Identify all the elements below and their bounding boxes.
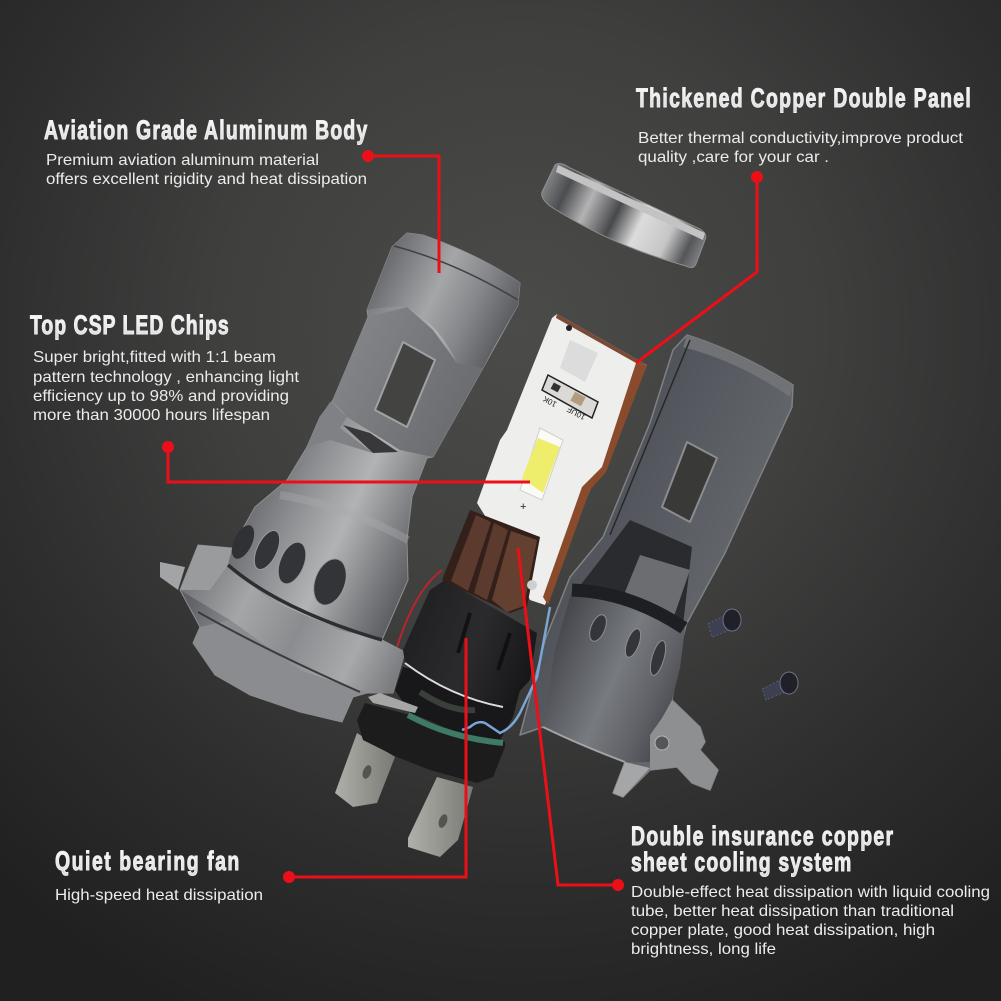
text block: CSP LED chips: Top CSP LED Chips: [30, 310, 229, 340]
text block: aviation aluminum body: Aviation Grade Aluminum Body: [44, 115, 367, 145]
callout line: LED chips: [162, 441, 530, 482]
text block: quiet fan: [55, 846, 263, 904]
text block: aviation aluminum body: offers excellent rigidity and heat dissipation: [46, 171, 367, 188]
text block: copper double panel: Thickened Copper Double Panel: [636, 83, 971, 113]
text block: aviation aluminum body: [44, 115, 367, 188]
LED circuit board: +: [520, 501, 526, 513]
screw 1: [708, 609, 741, 637]
text block: quiet fan: Quiet bearing fan: [55, 846, 239, 876]
small clip: [368, 693, 418, 713]
screw 2: [762, 672, 798, 700]
callout line: aluminum body: [362, 150, 439, 273]
text block: copper double panel: [636, 83, 971, 166]
rubber seal ring: [357, 703, 505, 783]
blue wire: [462, 607, 550, 733]
text block: copper sheet cooling: brightness, long life: [631, 941, 776, 958]
red wire: [397, 570, 442, 647]
text block: CSP LED chips: more than 30000 hours lifespan: [33, 407, 270, 424]
callout line: fan: [283, 638, 466, 883]
text block: aviation aluminum body: Premium aviation aluminum material: [46, 152, 319, 169]
text block: copper sheet cooling: Double insurance copper: [631, 821, 893, 851]
neck plate: [333, 307, 483, 457]
LED circuit board: 10K: [541, 394, 558, 409]
text block: copper double panel: Better thermal conductivity,improve product: [638, 130, 964, 147]
text block: CSP LED chips: efficiency up to 98% and providing: [33, 388, 289, 405]
text block: copper sheet cooling: sheet cooling system: [631, 847, 851, 877]
fan body: [357, 570, 550, 783]
text block: CSP LED chips: Super bright,fitted with 1:1 beam: [33, 349, 276, 366]
LED chip: [520, 428, 563, 500]
callout line: cooling system: [518, 548, 624, 891]
text block: copper sheet cooling: tube, better heat dissipation than traditional: [631, 903, 954, 920]
cap band: [367, 233, 520, 368]
text block: copper sheet cooling: copper plate, good heat dissipation, high: [631, 922, 935, 939]
electronics layer: [395, 667, 520, 740]
callout line: copper panel: [636, 171, 763, 363]
left aluminum shell: [160, 233, 520, 722]
copper double panel disc: [542, 164, 706, 268]
text block: copper sheet cooling: [631, 821, 990, 958]
bulb terminals: [335, 733, 473, 857]
text block: CSP LED chips: pattern technology , enhancing light: [33, 369, 300, 386]
LED circuit board: [477, 314, 647, 605]
LED circuit board: 10UF: [565, 405, 587, 422]
right half shell: [520, 335, 793, 797]
text block: copper double panel: quality ,care for your car .: [638, 149, 829, 166]
copper heat sink: [442, 510, 540, 613]
black dome: [403, 580, 537, 705]
text block: copper sheet cooling: Double-effect heat dissipation with liquid cooling: [631, 884, 990, 901]
text block: quiet fan: High-speed heat dissipation: [55, 887, 263, 904]
text block: CSP LED chips: [30, 310, 300, 424]
